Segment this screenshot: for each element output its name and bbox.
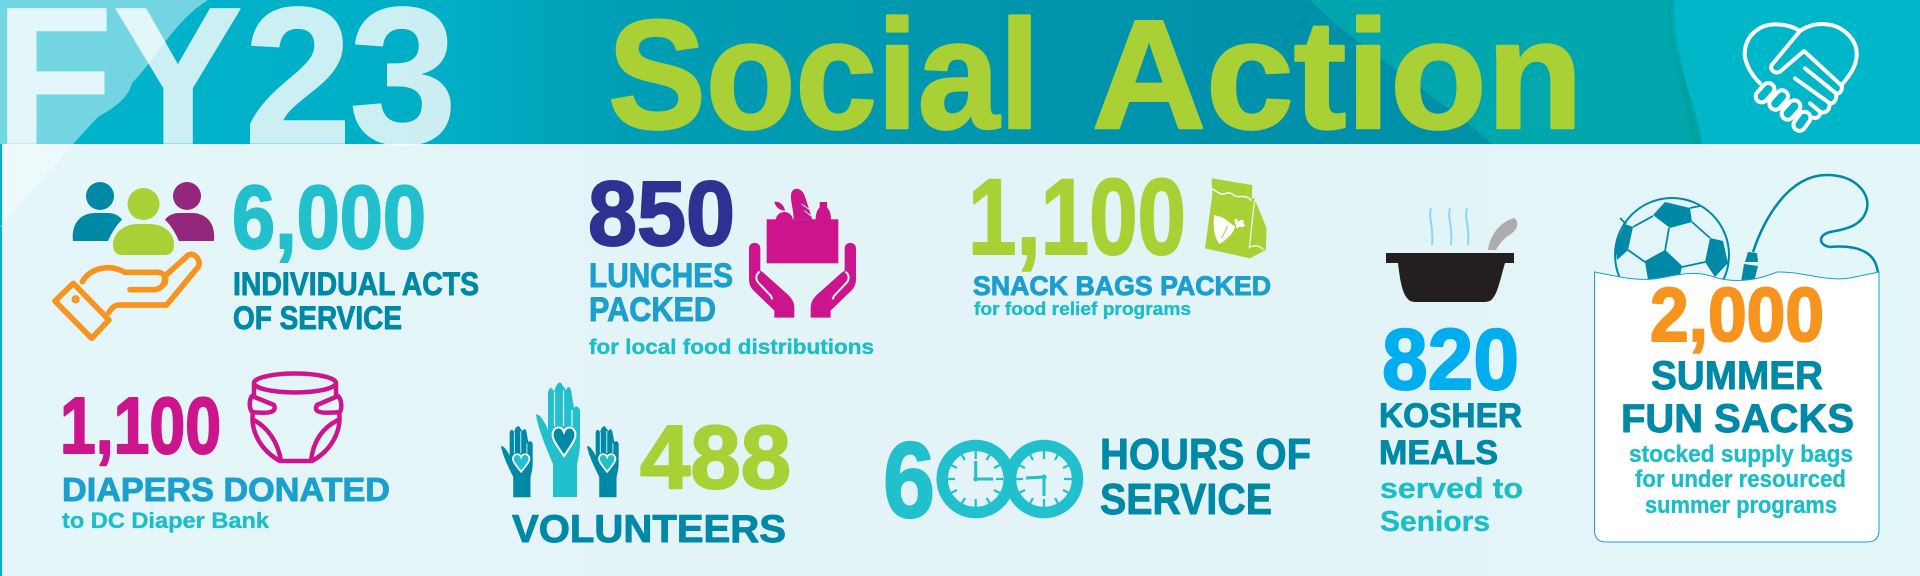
icon: food bag in hands: [749, 189, 856, 318]
icon: raised hands: [501, 382, 619, 497]
label: HOURS OF: [1100, 430, 1311, 479]
number: 6: 6: [883, 419, 935, 540]
heading: Social Action: [608, 0, 1583, 161]
icon: people in hand: [55, 182, 214, 338]
label: INDIVIDUAL ACTS: [233, 266, 479, 302]
icon: diaper: [250, 374, 341, 461]
icon: steaming pot: [1386, 208, 1517, 302]
number: 820: [1382, 312, 1519, 408]
caption line 3: summer programs: [1645, 492, 1837, 519]
label: KOSHER: [1379, 397, 1522, 435]
body panel: [0, 144, 1920, 576]
label line 2: FUN SACKS: [1621, 397, 1854, 441]
stat: 6,000 individual acts: [55, 168, 479, 338]
label: LUNCHES: [589, 257, 733, 295]
label: VOLUNTEERS: [512, 508, 786, 551]
stat: 600 hours: [883, 419, 1311, 540]
label: DIAPERS DONATED: [62, 471, 390, 508]
label line 2: MEALS: [1379, 434, 1498, 472]
number: 6,000: [232, 168, 426, 268]
number: 2,000: [1650, 273, 1824, 358]
number: 488: [640, 408, 791, 508]
label line 2: PACKED: [589, 291, 716, 329]
icon: jump rope: [1741, 175, 1878, 282]
caption line 2: for under resourced: [1635, 466, 1846, 493]
icon: heart handshake: [1745, 24, 1857, 133]
heading: FY23: [0, 0, 457, 185]
label line 2: OF SERVICE: [233, 300, 402, 336]
caption: served to: [1380, 473, 1523, 505]
stat: 488 volunteers: [501, 382, 791, 551]
number: 1,100: [968, 156, 1186, 277]
label: SUMMER: [1651, 354, 1823, 398]
icon: two clocks as zeros: [942, 446, 1078, 512]
caption: to DC Diaper Bank: [62, 508, 270, 533]
stat: 1,100 snack bags: [968, 156, 1271, 319]
icon: snack bag: [1205, 178, 1267, 258]
number: 1,100: [60, 381, 221, 470]
stat: 820 kosher meals: [1379, 208, 1523, 538]
header band: [0, 0, 1920, 144]
caption line 2: Seniors: [1380, 506, 1490, 538]
caption: for food relief programs: [974, 299, 1191, 319]
panel: sack card: [1594, 272, 1879, 542]
caption: for local food distributions: [589, 336, 874, 359]
stat: 2,000 summer fun sacks: [1594, 175, 1879, 542]
label line 2: SERVICE: [1100, 475, 1272, 524]
number: 850: [588, 163, 735, 265]
caption line 1: stocked supply bags: [1629, 441, 1853, 468]
icon: soccer ball: [1615, 198, 1729, 312]
label: SNACK BAGS PACKED: [973, 271, 1271, 301]
stat: 1,100 diapers: [60, 374, 390, 533]
stat: 850 lunches: [588, 163, 874, 359]
